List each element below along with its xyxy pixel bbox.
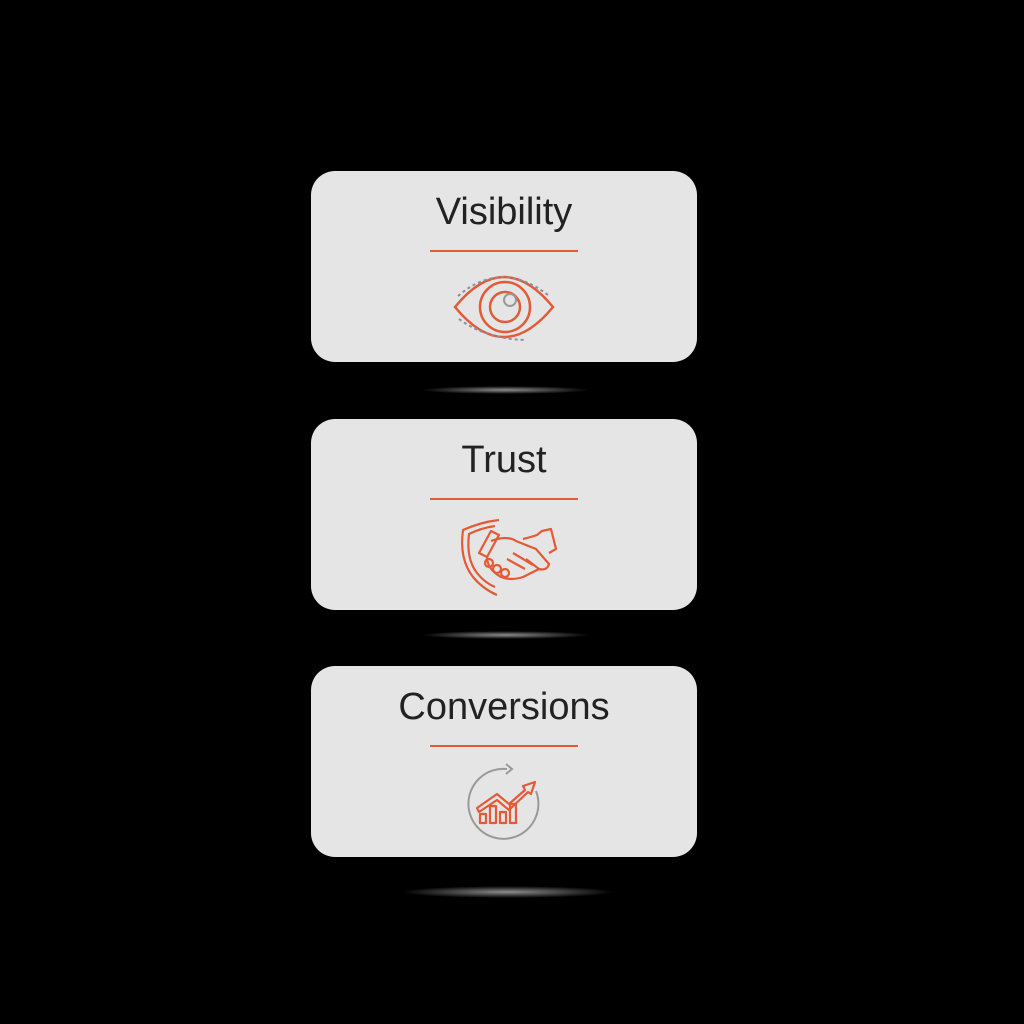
panel: conversions (311, 666, 697, 857)
underline (430, 498, 578, 500)
icon: eye (454, 276, 554, 341)
glow: under trust (420, 631, 590, 639)
panel: visibility (311, 171, 697, 362)
icon: shield handshake (461, 518, 558, 596)
panel: trust (311, 419, 697, 610)
glow: bottom shadow (400, 886, 615, 898)
underline (430, 745, 578, 747)
heading: Visibility: Visibility (436, 191, 572, 233)
icon: growth chart (467, 763, 540, 840)
glow: under visibility (420, 386, 590, 394)
heading: Conversions: Conversions (398, 686, 610, 728)
heading: Trust: Trust (461, 439, 547, 481)
underline (430, 250, 578, 252)
